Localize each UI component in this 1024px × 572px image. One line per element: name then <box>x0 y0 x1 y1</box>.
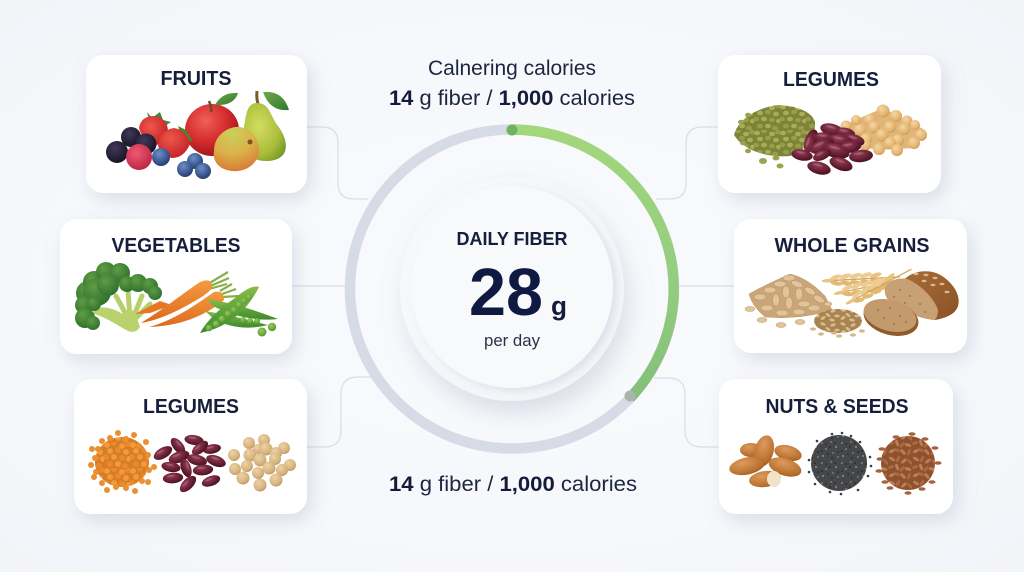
heading: LEGUMES <box>783 69 879 91</box>
icon: kidney beans <box>790 121 873 177</box>
fiber ring gauge <box>350 124 674 448</box>
icon: red lentils <box>88 430 157 494</box>
icon: chickpeas <box>840 104 927 156</box>
connector lines <box>292 127 734 447</box>
icon: chia seeds <box>808 432 872 495</box>
icon: kidney beans <box>152 434 227 495</box>
heading: LEGUMES <box>143 396 239 418</box>
bottom ratio text: 14 g fiber / 1,000 calories <box>389 473 637 496</box>
ring progress arc <box>512 130 674 398</box>
top text <box>389 57 635 110</box>
unit: g <box>551 291 567 321</box>
panel: nuts and seeds <box>719 379 953 514</box>
ratio: 14 g fiber / 1,000 calories <box>389 87 635 110</box>
panel: vegetables <box>60 219 292 354</box>
arc start dot <box>506 124 518 136</box>
icon: oat flakes <box>745 274 832 328</box>
heading: NUTS & SEEDS <box>766 396 908 418</box>
arc end dot <box>624 390 636 402</box>
heading: VEGETABLES <box>112 235 240 257</box>
panel: fruits <box>86 55 307 193</box>
ring track <box>350 130 674 448</box>
icon: fruit group <box>106 91 289 179</box>
icon: almonds <box>728 433 804 489</box>
dial heading: DAILY FIBER <box>456 228 568 249</box>
icon: wheat ears <box>822 263 915 310</box>
outer disc <box>400 177 624 401</box>
icon: flax seeds <box>876 432 942 495</box>
heading: WHOLE GRAINS <box>774 235 930 257</box>
icon: green lentils <box>734 105 815 168</box>
inner disc <box>411 186 613 388</box>
icon: grain pile <box>810 309 865 338</box>
central dial <box>400 177 624 401</box>
panel: legumes left <box>74 379 307 514</box>
fiber amount: 28 <box>469 255 543 330</box>
per day label: per day <box>484 331 540 350</box>
icon: bread loaf <box>885 271 959 320</box>
heading: FRUITS <box>160 68 232 90</box>
caption: Calnering calories <box>428 57 596 80</box>
panel: whole grains <box>734 219 967 353</box>
panel: legumes right <box>718 55 941 193</box>
icon: pea pods <box>200 286 278 336</box>
icon: broccoli <box>75 262 162 332</box>
icon: bread slice <box>860 294 922 342</box>
icon: chickpeas <box>228 434 296 492</box>
icon: carrots <box>135 272 240 327</box>
